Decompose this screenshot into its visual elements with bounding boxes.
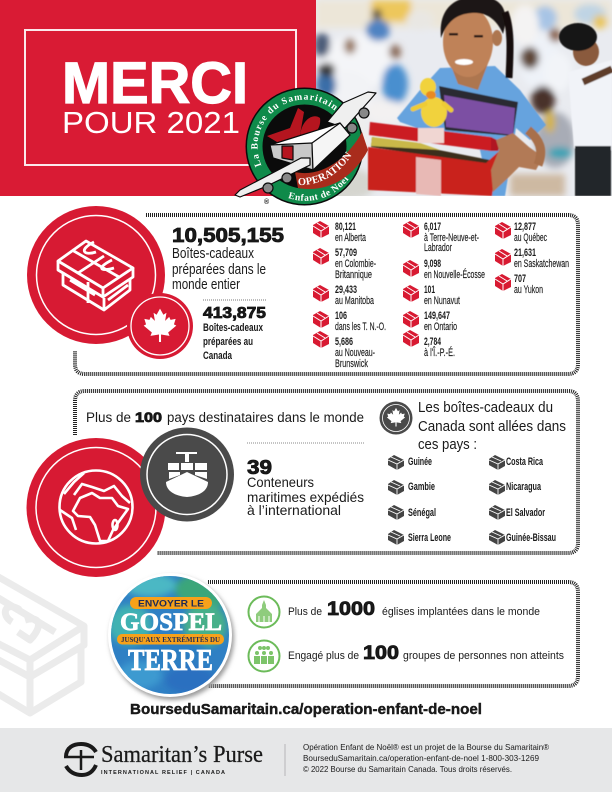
list: destination countries: Nicaragua bbox=[506, 481, 542, 493]
badge: Gospel to the ends of the earth: JUSQU'AUX EXTRÉMITÉS DU bbox=[121, 636, 220, 644]
website url: BourseduSamaritain.ca/operation-enfant-de-noel bbox=[130, 701, 482, 718]
list: provinces column 3: 707 bbox=[514, 273, 526, 285]
text: people groups bbox=[288, 643, 564, 664]
list: provinces column 2: en Ontario bbox=[424, 321, 457, 333]
text: churches planted: églises implantées dans le monde bbox=[382, 606, 540, 618]
list: destination countries: Costa Rica bbox=[506, 456, 544, 468]
list: provinces column 1: dans les T. N.-O. bbox=[335, 321, 386, 333]
text: worldwide total: 10,505,155 bbox=[172, 225, 284, 247]
badge word gospel: GOSPEL bbox=[120, 609, 222, 636]
list: provinces column 1 bbox=[313, 221, 386, 370]
badge pill top bbox=[130, 597, 212, 609]
text: Canadian boxes went to: Les boîtes-cadeaux du bbox=[418, 399, 553, 416]
list: destination countries: Sierra Leone bbox=[408, 532, 451, 544]
list: provinces column 3 bbox=[495, 221, 569, 296]
box base bbox=[368, 147, 498, 196]
footer band bbox=[0, 728, 612, 792]
panel: gospel frame bbox=[208, 582, 578, 686]
logo plane bbox=[235, 92, 376, 197]
list: provinces column 3: en Saskatchewan bbox=[514, 258, 569, 270]
book bbox=[439, 86, 518, 136]
footer logo: INTERNATIONAL RELIEF | CANADA bbox=[101, 770, 225, 776]
panel: countries frame bbox=[75, 391, 578, 553]
list: provinces column 3: 21,631 bbox=[514, 247, 536, 259]
logo: Operation Enfant de Noel: La Bourse du Samaritain bbox=[251, 94, 337, 168]
footer credits bbox=[303, 742, 549, 774]
footer credits: © 2022 Bourse du Samaritain Canada. Tous droits réservés. bbox=[303, 764, 512, 774]
text: Canada total: Canada bbox=[203, 350, 233, 362]
list: destination countries: Gambie bbox=[408, 481, 435, 493]
footer credits: BourseduSamaritain.ca/operation-enfant-de-noel 1-800-303-1269 bbox=[303, 753, 539, 763]
text: Canadian boxes went to: Canada sont allées dans bbox=[418, 418, 566, 435]
list: provinces column 2: en Nunavut bbox=[424, 295, 460, 307]
text: worldwide total: monde entier bbox=[172, 276, 240, 293]
title: POUR 2021 bbox=[62, 105, 240, 140]
text: Canada total: Boîtes-cadeaux bbox=[203, 322, 264, 334]
icon: gift box red circle bbox=[27, 206, 165, 344]
icon: globe red circle bbox=[26, 438, 166, 577]
list: provinces column 1: 57,709 bbox=[335, 247, 357, 259]
title: MERCI bbox=[62, 51, 248, 116]
icon: small maple leaf bbox=[380, 402, 412, 434]
logo bow bbox=[267, 108, 320, 146]
list: provinces column 2: 101 bbox=[424, 284, 435, 296]
footer logo: Samaritan’s Purse bbox=[101, 742, 263, 768]
list: provinces column 1: 106 bbox=[335, 310, 347, 322]
text: people groups: Engagé plus de bbox=[288, 650, 359, 662]
text: containers bbox=[247, 457, 364, 518]
list: provinces column 2: 149,647 bbox=[424, 310, 450, 322]
panel: gift boxes frame bbox=[75, 215, 578, 374]
icon: maple leaf circle bbox=[127, 293, 193, 359]
text: countries reached: 100 bbox=[135, 409, 162, 425]
text: worldwide total: Boîtes-cadeaux bbox=[172, 245, 254, 262]
text: Canadian boxes went to: ces pays : bbox=[418, 436, 477, 453]
list: destination countries: Guinée-Bissau bbox=[506, 532, 556, 544]
text: churches planted: 1000 bbox=[327, 599, 375, 620]
text: churches planted: Plus de bbox=[288, 606, 322, 618]
list: provinces column 2: à Terre-Neuve-et- bbox=[424, 232, 479, 244]
list: provinces column 3: au Québec bbox=[514, 232, 547, 244]
list: destination countries: El Salvador bbox=[506, 507, 545, 519]
icon: people group bbox=[248, 640, 280, 672]
list: destination countries bbox=[388, 455, 556, 545]
text: containers: à l’international bbox=[247, 502, 341, 518]
header red panel bbox=[0, 0, 317, 196]
list: provinces column 1: au Nouveau- bbox=[335, 347, 375, 359]
list: provinces column 1: au Manitoba bbox=[335, 295, 375, 307]
list: provinces column 1: 5,686 bbox=[335, 336, 353, 348]
right boy bbox=[572, 64, 612, 151]
icon: church bbox=[248, 596, 280, 628]
badge pill bottom bbox=[117, 634, 224, 644]
logo: Operation Enfant de Noel: Enfant de Noël bbox=[288, 177, 349, 201]
logo: Operation Enfant de Noel: OPERATION bbox=[298, 151, 352, 186]
text: containers: Conteneurs bbox=[247, 474, 314, 490]
girl shirt bbox=[397, 66, 546, 196]
logo banner bbox=[295, 132, 368, 189]
text: people groups: 100 bbox=[363, 643, 399, 664]
header inner border bbox=[25, 30, 296, 165]
text: countries reached: pays destinataires dans le monde bbox=[167, 410, 364, 425]
list: provinces column 1: 29,433 bbox=[335, 284, 357, 296]
list: provinces column 2: en Nouvelle-Écosse bbox=[424, 268, 485, 281]
list: provinces column 3: 12,877 bbox=[514, 221, 536, 233]
list: provinces column 1: en Colombie- bbox=[335, 258, 376, 270]
text: countries reached: Plus de bbox=[86, 410, 131, 425]
icon: cargo ship gray circle bbox=[140, 428, 234, 522]
badge: Gospel to the ends of the earth bbox=[108, 572, 235, 700]
list: provinces column 2: Labrador bbox=[424, 242, 452, 254]
text: people groups: groupes de personnes non atteints bbox=[403, 650, 564, 662]
text: Canadian boxes went to bbox=[418, 399, 566, 453]
logo ring text top bbox=[258, 100, 336, 166]
list: provinces column 2 bbox=[403, 221, 485, 359]
text: Canada total bbox=[203, 305, 266, 362]
text: containers: maritimes expédiés bbox=[247, 489, 364, 505]
list: provinces column 2: 9,098 bbox=[424, 258, 441, 270]
icon: ghost gift box bbox=[0, 575, 84, 713]
text: worldwide total bbox=[172, 225, 284, 293]
box interior bbox=[371, 137, 490, 165]
badge word terre: TERRE bbox=[128, 642, 213, 677]
text: containers: 39 bbox=[247, 457, 272, 479]
text: countries reached bbox=[86, 409, 364, 425]
box lid bbox=[369, 122, 491, 151]
neck and face bbox=[452, 62, 489, 90]
badge: Gospel to the ends of the earth: ENVOYER LE bbox=[138, 598, 204, 608]
text: Canada total: 413,875 bbox=[203, 305, 266, 322]
list: provinces column 1: en Alberta bbox=[335, 232, 367, 244]
hand bbox=[491, 133, 543, 192]
list: destination countries: Sénégal bbox=[408, 507, 436, 519]
list: destination countries: Guinée bbox=[408, 456, 432, 468]
list: provinces column 2: à l'Î.-P.-É. bbox=[424, 346, 455, 359]
list: provinces column 3: au Yukon bbox=[514, 284, 543, 296]
list: provinces column 1: 80,121 bbox=[335, 221, 356, 233]
text: Canada total: préparées au bbox=[203, 336, 253, 348]
logo: Operation Enfant de Noel bbox=[234, 88, 377, 206]
list: provinces column 2: 6,017 bbox=[424, 221, 441, 233]
list: provinces column 1: Britannique bbox=[335, 269, 372, 281]
photo: girl holding shoebox gift bbox=[314, 0, 612, 200]
list: provinces column 2: 2,784 bbox=[424, 336, 442, 348]
duck bbox=[421, 97, 447, 127]
list: provinces column 1: Brunswick bbox=[335, 358, 368, 370]
logo registered mark: ® bbox=[264, 198, 270, 206]
footer credits: Opération Enfant de Noël® est un projet de la Bourse du Samaritain® bbox=[303, 742, 549, 752]
footer logo bbox=[64, 742, 263, 776]
text: churches planted bbox=[288, 599, 540, 620]
logo ring text bottom bbox=[288, 160, 358, 201]
text: worldwide total: préparées dans le bbox=[172, 261, 266, 278]
